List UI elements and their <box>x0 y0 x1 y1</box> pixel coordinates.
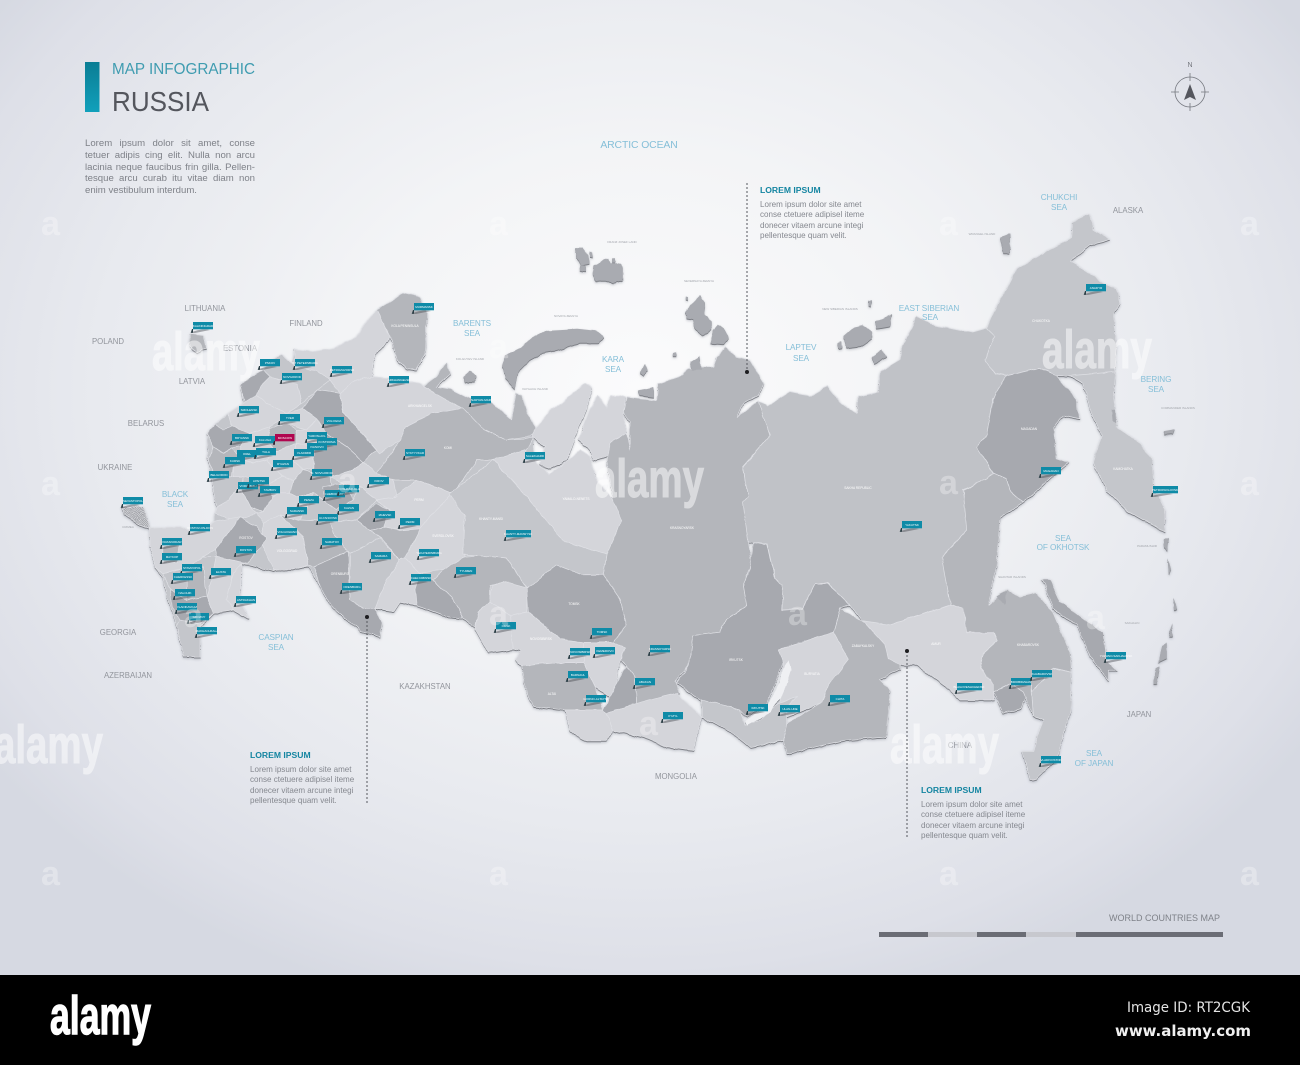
region and island labels: KHANTY-MANSI <box>479 517 503 521</box>
watermark: a <box>184 597 204 635</box>
scale caption: WORLD COUNTRIES MAP <box>1109 913 1220 923</box>
watermark: a <box>1240 205 1260 243</box>
city pins <box>120 284 1178 767</box>
region and island labels <box>122 232 1195 696</box>
callout: north: conse ctetuere adipisel iteme <box>760 210 864 219</box>
watermark: alamy <box>595 449 704 509</box>
sea and ocean labels <box>162 140 1171 768</box>
city pins: ABAKAN <box>639 680 651 684</box>
city pins: MURMANSK <box>415 305 433 309</box>
city pins: KHABAROVSK <box>1032 672 1052 676</box>
watermark: a <box>489 205 509 243</box>
city pins: ORENBURG <box>343 585 361 589</box>
city pins: CHEBOKSARY <box>325 492 345 496</box>
city pins: IZHEVSK <box>379 513 391 517</box>
city pins: ASTRAKHAN <box>237 598 255 602</box>
callout: north: donecer vitaem arcune integi <box>760 221 863 230</box>
region and island labels: NOVAYA ZEMLYA <box>554 314 578 318</box>
sea and ocean labels: BLACK <box>162 490 189 499</box>
city pins: MAYKOP <box>166 555 178 559</box>
region and island labels: TOMSK <box>568 602 581 606</box>
watermark: a <box>489 855 509 893</box>
city pins: YAKUTSK <box>905 523 919 527</box>
city pins: KIROV <box>374 479 384 483</box>
city pins: KEMEROVO <box>596 649 614 653</box>
Sakha region <box>743 316 1007 625</box>
region and island labels: ORENBURG <box>331 572 350 576</box>
sea and ocean labels: OF OKHOTSK <box>1037 543 1090 552</box>
map of Russia <box>122 214 1177 779</box>
city pins: STAVROPOL <box>183 566 201 570</box>
region and island labels: NEW SIBERIAN ISLANDS <box>822 307 858 311</box>
region and island labels: WRANGEL ISLAND <box>969 232 996 236</box>
city pins: SARATOV <box>325 540 339 544</box>
sea and ocean labels: SEA <box>167 500 184 509</box>
region and island labels: ROSTOV <box>239 536 254 540</box>
watermark: a <box>639 705 659 743</box>
city pins: KAZAN <box>344 506 354 510</box>
city pins: RYAZAN <box>277 462 289 466</box>
city pins: YOSHKAR-OLA <box>338 487 360 491</box>
city pins: TVER <box>286 416 295 420</box>
intro paragraph: enim vestibulum interdum. <box>85 185 197 196</box>
sea and ocean labels: BERING <box>1141 375 1171 384</box>
city pins: SARANSK <box>290 509 304 513</box>
watermark: a <box>489 328 509 366</box>
city pins: SAMARA <box>375 554 387 558</box>
city pins: NOVGOROD <box>283 375 302 379</box>
city pins: SYKTYVKAR <box>406 451 425 455</box>
city pins: VOLOGDA <box>327 419 341 423</box>
callout: north: pellentesque quam velit. <box>760 231 847 240</box>
sea and ocean labels: SEA <box>1148 385 1165 394</box>
city pins: VLADIKAVKAZ <box>177 605 197 609</box>
city pins: PERM <box>406 520 415 524</box>
sea and ocean labels: OF JAPAN <box>1075 759 1113 768</box>
city pins: NALCHIK <box>178 591 192 595</box>
city pins: KHANTY-MANSIYSK <box>504 532 532 536</box>
country labels: FINLAND <box>289 319 323 328</box>
Far East regions <box>863 214 1165 779</box>
region and island labels: FRANZ JOSEF LAND <box>607 240 637 244</box>
watermark: a <box>788 595 808 633</box>
region and island labels: SAKHALIN <box>1125 621 1139 625</box>
watermark: a <box>939 205 959 243</box>
city pins: IVANOVO <box>310 445 324 449</box>
image id: Image ID: RT2CGK <box>1127 1000 1251 1016</box>
city pins: BLAGOVESHCHENSK <box>953 685 985 689</box>
city pins: VLADIVOSTOK <box>1040 758 1062 762</box>
region and island labels: IRKUTSK <box>729 658 744 662</box>
sea and ocean labels: SEA <box>605 365 622 374</box>
country labels: LATVIA <box>179 377 206 386</box>
country labels: UKRAINE <box>98 463 132 472</box>
city pins: KYZYL <box>668 714 678 718</box>
city pins: MAGADAN <box>1043 469 1059 473</box>
city pins: OREL <box>243 452 251 456</box>
country labels: KAZAKHSTAN <box>399 682 451 691</box>
city pins: VLADIMIR <box>297 451 312 455</box>
sea and ocean labels: LAPTEV <box>786 343 817 352</box>
Siberia regions <box>450 348 900 754</box>
callout: west: LOREM IPSUM <box>250 750 311 760</box>
callout: north: Lorem ipsum dolor site amet <box>760 200 862 209</box>
city pins: MAKHACHKALA <box>196 629 218 633</box>
city pins: ROSTOV <box>240 548 252 552</box>
scale bar <box>879 932 1223 937</box>
city pins: PETROPAVLOVSK <box>1152 488 1178 492</box>
sea and ocean labels: SEA <box>922 313 939 322</box>
title: map infographic: MAP INFOGRAPHIC <box>112 61 255 78</box>
region and island labels: BURYATIA <box>804 672 821 676</box>
region and island labels: VOLGOGRAD <box>277 549 298 553</box>
watermark <box>0 205 1260 893</box>
city pins: NARYAN-MAR <box>471 398 492 402</box>
city pins: NOVOSIBIRSK <box>570 650 590 654</box>
watermark: a <box>41 855 61 893</box>
watermark: a <box>489 595 509 633</box>
country labels: MONGOLIA <box>655 772 698 781</box>
intro paragraph: tetuer adipis cing elit. Nulla non arcu <box>85 150 255 161</box>
country labels <box>92 206 1151 781</box>
region and island labels: CRIMEA <box>122 525 134 529</box>
region and island labels: PARAMUSHIR <box>1137 544 1158 548</box>
city pins: GORNO-ALTAYSK <box>583 697 609 701</box>
city pins: TOMSK <box>597 630 607 634</box>
sea and ocean labels: ARCTIC OCEAN <box>600 140 678 151</box>
watermark: alamy <box>1042 320 1152 380</box>
website: www.alamy.com <box>1115 1022 1251 1040</box>
city pins: SEVASTOPOL <box>123 499 143 503</box>
country labels: POLAND <box>92 337 124 346</box>
sea and ocean labels: CASPIAN <box>258 633 294 642</box>
watermark: a <box>1240 855 1260 893</box>
city pins: SALEKHARD <box>526 454 545 458</box>
city pins: YAROSLAVL <box>308 434 326 438</box>
city pins: ULAN-UDE <box>782 707 798 711</box>
country labels: LITHUANIA <box>185 304 226 313</box>
region and island labels: SHANTAR ISLANDS <box>998 575 1026 579</box>
compass <box>1171 62 1209 111</box>
city pins: LIPETSK <box>253 479 265 483</box>
callout: east <box>921 785 1025 840</box>
region and island labels: ARKHANGELSK <box>408 404 433 408</box>
city pins: YEKATERINBURG <box>416 551 442 555</box>
watermark: alamy <box>152 322 260 382</box>
callout: west: Lorem ipsum dolor site amet <box>250 765 352 774</box>
callout: east: Lorem ipsum dolor site amet <box>921 800 1023 809</box>
callout line: east <box>905 649 909 838</box>
city pins: BIROBIDZHAN <box>1011 680 1031 684</box>
city pins: OMSK <box>502 624 510 628</box>
city pins: KRASNODAR <box>162 540 182 544</box>
watermark: a <box>1086 599 1106 637</box>
city pins: CHITA <box>836 697 844 701</box>
watermark: a <box>939 464 959 502</box>
region and island labels: ALTAI <box>548 692 556 696</box>
title: Russia: RUSSIA <box>112 86 209 117</box>
region and island labels: SVERDLOVSK <box>432 534 455 538</box>
city pins: GROZNY <box>193 615 205 619</box>
city pins: TAMBOV <box>264 488 276 492</box>
sea and ocean labels: SEA <box>268 643 285 652</box>
watermark: a <box>1240 465 1260 503</box>
city pins: VOLGOGRAD <box>277 530 297 534</box>
city pins: BELGOROD <box>210 473 228 477</box>
city pins: TYUMEN <box>460 569 472 573</box>
city pins: IRKUTSK <box>751 706 765 710</box>
region and island labels: ZABAYKALSKY <box>852 644 875 648</box>
callout: east: LOREM IPSUM <box>921 785 982 795</box>
region and island labels: SAKHA REPUBLIC <box>844 486 872 490</box>
callout: west: conse ctetuere adipisel iteme <box>250 775 354 784</box>
region and island labels: VAYGACH ISLAND <box>522 387 549 391</box>
pin: Moscow: MOSCOW <box>278 436 292 440</box>
sea and ocean labels: SEA <box>1055 534 1072 543</box>
city pins: VORONEZH <box>239 484 257 488</box>
city pins: YUZHNO-SAKHALINSK <box>1100 654 1132 658</box>
city pins: TULA <box>262 450 270 454</box>
callout line: north <box>745 183 749 374</box>
sea and ocean labels: SEA <box>1051 203 1068 212</box>
region and island labels: KOMI <box>444 446 452 450</box>
callout: east: conse ctetuere adipisel iteme <box>921 810 1025 819</box>
city pins: ST PETERSBURG <box>292 361 318 365</box>
region and island labels: KOLGUYEV ISLAND <box>456 357 485 361</box>
intro paragraph: tesque arcu curab itu vitae diam non <box>85 173 255 184</box>
region and island labels: NOVOSIBIRSK <box>530 637 553 641</box>
sea and ocean labels: SEA <box>464 329 481 338</box>
intro paragraph: lacinia neque faucibus frin gilla. Pellen- <box>85 162 255 172</box>
country labels: JAPAN <box>1127 710 1151 719</box>
callout: east: donecer vitaem arcune integi <box>921 821 1024 830</box>
sea and ocean labels: EAST SIBERIAN <box>899 304 959 313</box>
city pins: BRYANSK <box>235 436 249 440</box>
intro paragraph: Lorem ipsum dolor sit amet, conse <box>85 138 255 149</box>
city pins: KURSK <box>230 459 240 463</box>
country labels: BELARUS <box>128 419 164 428</box>
country labels: ESTONIA <box>223 344 258 353</box>
city pins: CHELYABINSK <box>411 576 431 580</box>
callout line: west <box>365 615 369 803</box>
city pins: N. NOVGOROD <box>311 471 334 475</box>
title accent bar <box>85 62 100 112</box>
sea and ocean labels: SEA <box>793 354 810 363</box>
region and island labels: PERM <box>414 498 424 502</box>
region and island labels: MAGADAN <box>1021 427 1038 431</box>
city pins: ELISTA <box>216 570 226 574</box>
region and island labels: SEVERNAYA ZEMLYA <box>684 279 714 283</box>
city pins: KOSTROMA <box>318 440 336 444</box>
region and island labels: KRASNOYARSK <box>670 526 695 530</box>
intro paragraph <box>85 138 255 196</box>
city pins: PENZA <box>304 498 314 502</box>
country labels: ALASKA <box>1113 206 1144 215</box>
callout: west <box>250 750 354 805</box>
callout: north: LOREM IPSUM <box>760 185 821 195</box>
city pins: KALININGRAD <box>193 324 214 328</box>
city pins: KRASNOYARSK <box>649 647 671 651</box>
callout: west: donecer vitaem arcune integi <box>250 786 353 795</box>
footer bar <box>0 975 1300 1065</box>
city pins: SMOLENSK <box>241 408 257 412</box>
region and island labels: KAMCHATKA <box>1113 467 1134 471</box>
region and island labels: YAMALO-NENETS <box>562 497 590 501</box>
sea and ocean labels: BARENTS <box>453 319 492 328</box>
compass: N <box>1187 62 1193 69</box>
watermark: alamy <box>890 715 999 775</box>
sea and ocean labels: SEA <box>1086 749 1103 758</box>
watermark: a <box>939 855 959 893</box>
country labels: CHINA <box>948 741 973 750</box>
region and island labels: KOLA PENINSULA <box>391 324 420 328</box>
callout: west: pellentesque quam velit. <box>250 796 337 805</box>
city pins: ULYANOVSK <box>319 516 337 520</box>
city pins: BARNAUL <box>571 673 585 677</box>
sea and ocean labels: CHUKCHI <box>1041 193 1077 202</box>
footer logo: alamy <box>50 986 151 1046</box>
European Russia regions <box>122 293 540 657</box>
Arctic and Pacific islands <box>463 249 893 397</box>
city pins: PSKOV <box>265 361 275 365</box>
callout: east: pellentesque quam velit. <box>921 831 1008 840</box>
region and island labels: KHABAROVSK <box>1017 643 1040 647</box>
city pins: ARKHANGELSK <box>388 378 410 382</box>
watermark: a <box>41 205 61 243</box>
callout: north <box>760 185 864 240</box>
country labels: GEORGIA <box>100 628 137 637</box>
city pins: ROSTOV-ON-DON <box>187 526 213 530</box>
country labels: AZERBAIJAN <box>104 671 152 680</box>
pin: Moscow <box>273 434 294 445</box>
city pins: CHERKESSK <box>174 575 192 579</box>
watermark: a <box>338 462 358 500</box>
watermark: a <box>41 465 61 503</box>
city pins: PETROZAVODSK <box>330 368 354 372</box>
region and island labels: COMMANDER ISLANDS <box>1161 406 1195 410</box>
city pins: KALUGA <box>259 438 271 442</box>
city pins: ANADYR <box>1090 286 1103 290</box>
sea and ocean labels: KARA <box>602 355 625 364</box>
region and island labels: CHUKOTKA <box>1032 319 1051 323</box>
region and island labels: AMUR <box>931 642 941 646</box>
